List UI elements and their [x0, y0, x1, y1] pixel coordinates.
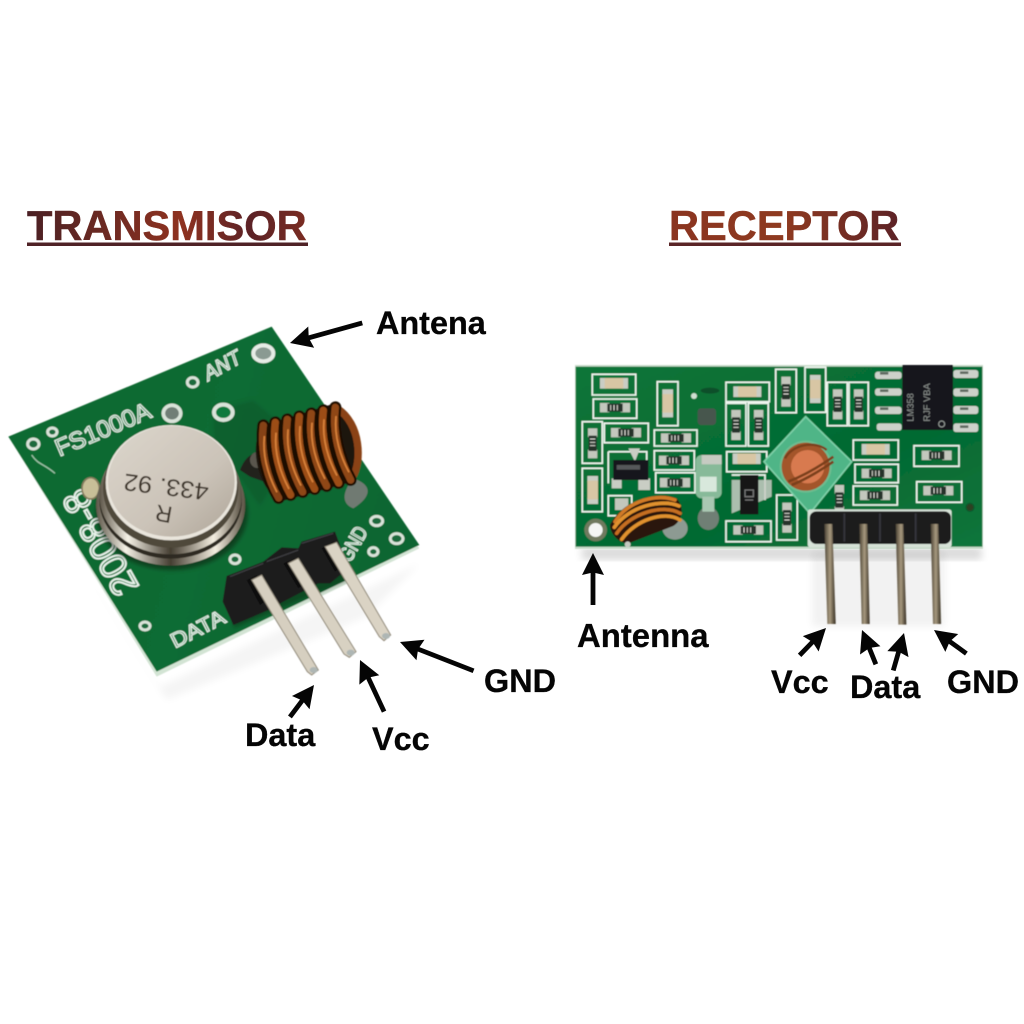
label: Vcc (receiver): Vcc [771, 664, 829, 700]
receiver circuit board [575, 365, 983, 549]
board holes and solder pads [28, 345, 403, 630]
silkscreen outlines [582, 367, 962, 542]
silkscreen text: FS1000A: FS1000A [51, 398, 155, 462]
receiver antenna coil [610, 495, 688, 547]
receiver module [575, 365, 983, 627]
header pins [252, 542, 391, 675]
arrow: Vcc (transmitter) [350, 655, 394, 716]
arrow: GND (transmitter) [396, 632, 478, 681]
crystal can: 433. 92 [122, 468, 210, 505]
silkscreen text: date code: 2008-8 [54, 482, 146, 603]
antenna hole [584, 519, 607, 541]
receiver board face [576, 367, 982, 547]
label: Data (transmitter): Data [245, 717, 316, 753]
label: Data (receiver): Data [850, 669, 921, 705]
label: Antenna (receiver): Antenna [577, 617, 709, 654]
arrow: Antenna (receiver) [582, 553, 604, 605]
adjustable coil in diamond [764, 417, 852, 513]
small transistor near top [691, 388, 719, 425]
transmitter shadow [20, 473, 420, 700]
arrow: Antena (transmitter) [287, 312, 365, 354]
crystal can [82, 425, 248, 570]
silkscreen text: GND: GND [334, 523, 373, 566]
receiver pin header [808, 509, 952, 547]
transistor [612, 448, 650, 490]
silkscreen text: ANT: ANT [198, 346, 246, 386]
label: GND (transmitter): GND [484, 663, 556, 699]
silkscreen text: DATA: DATA [167, 606, 229, 653]
surface mount parts [587, 375, 953, 535]
label: Vcc (transmitter): Vcc [372, 721, 430, 757]
black pin header [223, 532, 353, 628]
arrow: Data left (receiver) [852, 626, 886, 668]
eight pin IC: RJF VBA [922, 383, 932, 422]
title: RECEPTOR: RECEPTOR [669, 202, 899, 249]
RF transistor [732, 475, 772, 514]
label: Antena: Antena [376, 305, 487, 341]
mounting hole [966, 503, 974, 511]
copper coil [240, 403, 368, 508]
eight pin IC [875, 365, 978, 432]
arrow: Vcc (receiver) [792, 620, 834, 663]
receiver header pins [824, 524, 941, 625]
receiver shadow [582, 547, 982, 560]
eight pin IC: LM358 [905, 393, 915, 422]
arrow: Data right (receiver) [883, 630, 915, 674]
label: GND (receiver): GND [947, 664, 1019, 700]
crystal can: R [153, 499, 174, 528]
arrow: Data (transmitter) [281, 678, 323, 724]
transmitter module [8, 327, 420, 700]
transmitter circuit board [8, 327, 419, 677]
receiver pin shadows [812, 550, 945, 627]
title: TRANSMISOR: TRANSMISOR [27, 202, 307, 249]
arrow: GND (receiver) [928, 621, 973, 662]
glass diode [696, 455, 722, 530]
